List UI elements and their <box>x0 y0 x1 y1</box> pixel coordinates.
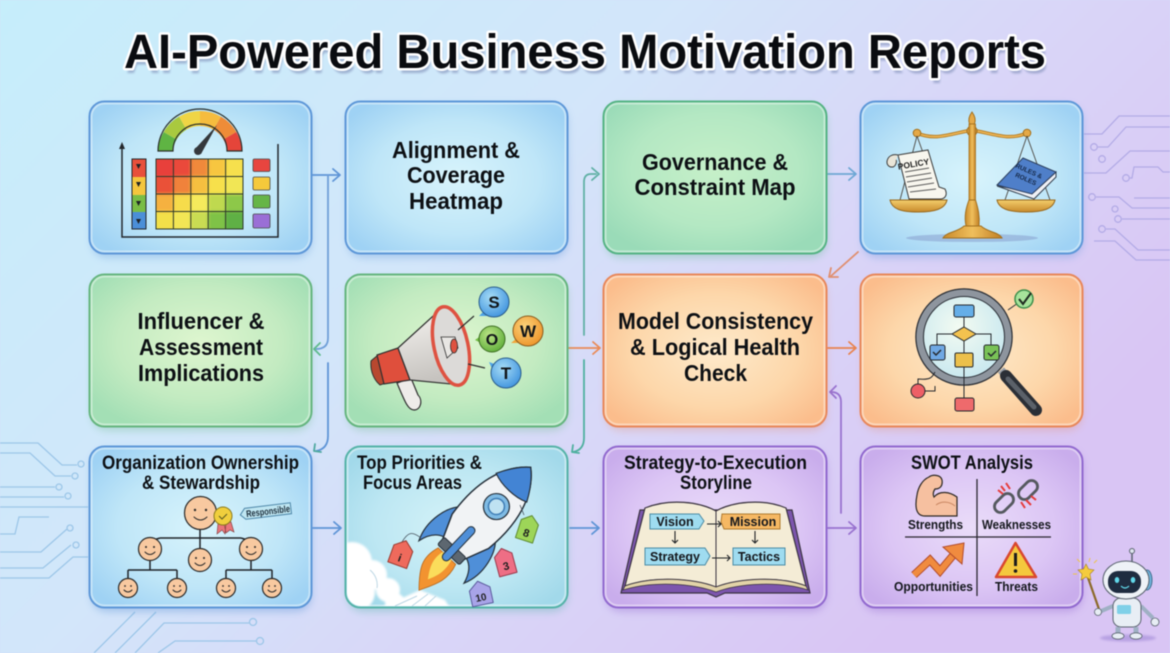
axis arrowhead <box>119 142 125 149</box>
heading: Top Priorities & Focus Areas <box>357 453 482 494</box>
panel: magnifier flowchart visual <box>860 274 1083 431</box>
arrow: Top Priorities to Strategy <box>570 522 599 534</box>
bubble: O <box>475 326 505 352</box>
panel: Organization Ownership & Stewardship <box>90 446 312 612</box>
panel: Alignment & Coverage Heatmap <box>346 102 568 258</box>
icon: megaphone <box>371 303 485 410</box>
heading: Strategy-to-Execution Storyline: Strategy-to-Execution <box>624 453 807 474</box>
heading: Model Consistency: Model Consistency <box>618 308 813 334</box>
label: Vision: Vision <box>656 515 694 529</box>
heading: Strategy-to-Execution Storyline: Storyline <box>680 473 752 494</box>
heading: Governance & Constraint Map: Governance & <box>642 149 788 175</box>
org chart: second row faces <box>138 538 262 572</box>
arrow: vertical connector to Influencer panel <box>314 175 328 355</box>
circuit traces: left <box>0 443 264 653</box>
panel: policy scale visual <box>860 102 1083 258</box>
legend swatches <box>253 159 270 228</box>
arrow: heatmap visual to Alignment panel <box>312 169 340 181</box>
storyline arrows <box>672 521 758 561</box>
legend strip <box>132 159 146 229</box>
heading: Model Consistency <box>618 308 813 386</box>
arrow: Strategy to SWOT <box>828 522 856 534</box>
icon: rulebook: ROLES <box>1014 172 1038 188</box>
label: Strengths: Strengths <box>908 518 963 532</box>
org chart: lead face <box>184 496 216 530</box>
heading: Influencer & Assessment Implications <box>138 308 264 386</box>
bubble: W <box>511 316 543 346</box>
icon: balance scale <box>890 112 1055 242</box>
tag: Responsible <box>240 503 292 521</box>
bubble: O: O <box>486 332 498 349</box>
heading: Alignment & Coverage Heatmap: Alignment & <box>392 137 520 163</box>
heading: Alignment & Coverage Heatmap: Heatmap <box>409 188 503 214</box>
SWOT quadrant dividers <box>905 479 1051 596</box>
title: AI-Powered Business Motivation Reports <box>124 26 1046 79</box>
heading: Organization Ownership & Stewardship: & Stewardship <box>142 473 260 494</box>
arrow: connector to Governance panel <box>584 168 599 335</box>
bubble: S: S <box>488 293 500 312</box>
priority tags: 8 <box>521 527 531 540</box>
org chart connectors <box>128 530 272 579</box>
heading: Influencer & Assessment Implications: Implications <box>138 360 264 386</box>
panel: Governance & Constraint Map <box>604 102 827 258</box>
label: Weaknesses: Weaknesses <box>982 518 1051 532</box>
label: Opportunities: Opportunities <box>894 580 973 594</box>
tag: Responsible: Responsible <box>246 504 291 520</box>
label: Vision <box>650 514 704 529</box>
heat grid <box>154 158 244 230</box>
icon: magnifying glass <box>916 289 1036 410</box>
exhaust streaks <box>370 570 436 606</box>
arrow: Organization to Top Priorities <box>313 522 341 534</box>
heading: Top Priorities & Focus Areas: Top Priorities & <box>357 453 482 474</box>
heading: Alignment & Coverage Heatmap: Coverage <box>407 162 505 188</box>
heading: Organization Ownership & Stewardship <box>102 453 299 494</box>
heading: Alignment & Coverage Heatmap <box>392 137 520 214</box>
icon: policy scroll <box>887 150 946 199</box>
org chart: third row faces <box>118 578 282 598</box>
arrow: Model Consistency to magnifier <box>828 342 856 354</box>
icon: warning triangle <box>996 543 1036 577</box>
circuit traces: right <box>1084 116 1170 260</box>
arrow: megaphone to Model Consistency <box>568 342 600 354</box>
title: AI-Powered Business Motivation Reports <box>126 31 1048 84</box>
heading: Strategy-to-Execution Storyline <box>624 453 807 494</box>
icon: robot with wand <box>1073 548 1159 642</box>
arrow: connector down to Top Priorities panel <box>572 360 584 453</box>
icon: broken chain <box>992 478 1040 515</box>
panel: heatmap visual <box>90 102 312 258</box>
arrow: scale diagonal to Model Consistency <box>829 252 858 277</box>
priority tags: i <box>396 552 403 565</box>
icon: open book <box>621 502 810 597</box>
label: Mission: Mission <box>730 515 776 529</box>
gauge outline <box>158 109 242 151</box>
heading: Model Consistency: Check <box>684 360 747 386</box>
panel: megaphone SWOT visual <box>346 274 568 431</box>
label: Tactics <box>733 548 785 565</box>
icon: rulebook <box>997 158 1056 199</box>
panel: Strategy-to-Execution Storyline <box>604 446 827 612</box>
bubble: T: T <box>501 364 512 383</box>
icon: policy scroll: POLICY <box>897 156 930 172</box>
arrow: Governance to scale <box>828 168 856 180</box>
gauge <box>166 118 234 151</box>
heading: Governance & Constraint Map: Constraint Map <box>634 174 796 200</box>
bubble: S <box>479 287 509 317</box>
heading: Organization Ownership & Stewardship: Organization Ownership <box>102 453 299 474</box>
bubble: W: W <box>520 322 537 341</box>
heading: Top Priorities & Focus Areas: Focus Areas <box>363 473 462 494</box>
icon: rocket <box>391 443 556 612</box>
icon: award ribbon <box>214 507 234 534</box>
heatmap axes <box>122 144 278 237</box>
heading: Governance & Constraint Map <box>634 149 796 200</box>
arrow: SWOT connector up to Model Consistency <box>830 386 841 513</box>
label: Strategy <box>645 548 710 565</box>
bubble: T <box>489 358 521 388</box>
label: Threats: Threats <box>995 580 1038 594</box>
icon: growth arrow <box>914 543 964 575</box>
exhaust cloud <box>346 540 450 606</box>
label: Strategy: Strategy <box>650 550 700 564</box>
gauge needle <box>194 125 217 155</box>
priority tags: 10 <box>475 592 488 605</box>
panel: Top Priorities & Focus Areas <box>332 443 568 613</box>
heading: Model Consistency: & Logical Health <box>630 334 800 360</box>
panel: SWOT Analysis <box>860 446 1083 612</box>
arrow: connector down to Organization panel <box>314 363 328 452</box>
priority tags <box>388 505 541 607</box>
label: Tactics: Tactics <box>738 550 780 564</box>
icon: flexed arm <box>916 475 957 516</box>
heading: SWOT Analysis: SWOT Analysis <box>911 453 1033 474</box>
heading: Influencer & Assessment Implications: Assessment <box>139 334 263 360</box>
icon: check badge <box>1008 290 1033 310</box>
panel: Model Consistency & Logical Health Check <box>604 274 827 431</box>
priority tags: 3 <box>502 560 511 573</box>
panel: Influencer & Assessment Implications <box>90 274 312 431</box>
icon: rulebook: RULES & <box>1014 163 1043 181</box>
heading: Influencer & Assessment Implications: Influencer & <box>138 308 264 334</box>
icon: flowchart <box>911 305 999 411</box>
